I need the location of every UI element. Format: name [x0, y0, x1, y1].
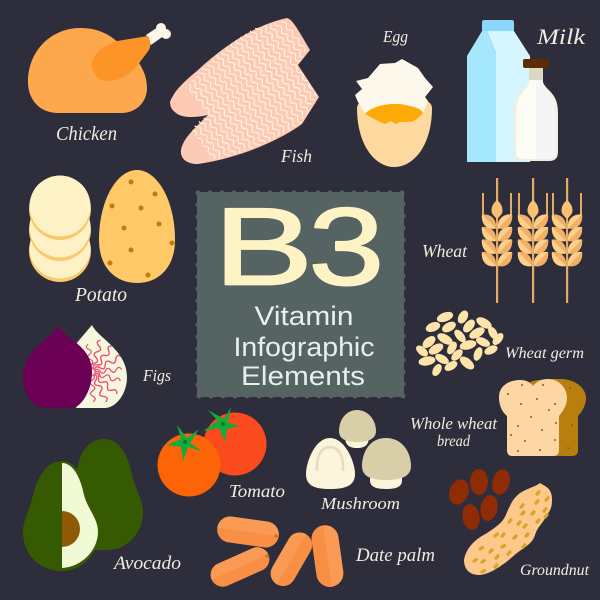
icon: mushrooms — [306, 410, 411, 489]
icon: fish fillets — [170, 18, 319, 164]
label: fish: Fish — [280, 146, 312, 166]
label: groundnut: Groundnut — [520, 562, 590, 579]
label: egg: Egg — [382, 27, 408, 46]
panel: title — [197, 185, 404, 397]
icon: potato slices — [29, 176, 91, 282]
icon: figs — [23, 325, 127, 408]
label: milk: Milk — [536, 24, 586, 49]
icon: egg — [355, 59, 433, 167]
label: mushroom: Mushroom — [320, 494, 400, 513]
label: chicken: Chicken — [56, 123, 117, 145]
label: whole wheat bread: Whole wheat — [410, 414, 498, 433]
text: Vitamin Infographic Elements: Vitamin — [254, 301, 354, 331]
text: Vitamin Infographic Elements: Infographic — [234, 332, 374, 362]
heading: B3 — [214, 185, 384, 308]
label: date palm: Date palm — [355, 546, 435, 566]
label: avocado: Avocado — [112, 553, 181, 574]
icon: bread — [499, 379, 586, 456]
text: Vitamin Infographic Elements — [234, 301, 374, 391]
label: wheat: Wheat — [422, 241, 468, 261]
icon: date palm — [207, 515, 345, 591]
icon: tomatoes — [158, 407, 266, 496]
label: tomato: Tomato — [229, 481, 285, 501]
icon: date fruit — [446, 467, 513, 531]
label: figs: Figs — [142, 366, 171, 385]
heading: B3: 3 — [308, 186, 384, 308]
icon: avocado — [23, 439, 143, 571]
icon: wheat — [482, 178, 582, 303]
icon: chicken — [28, 23, 171, 113]
label: whole wheat bread: bread — [437, 433, 471, 450]
icon: groundnut — [464, 483, 552, 575]
label: potato: Potato — [74, 285, 127, 306]
icon: whole potato — [99, 170, 175, 283]
icon: milk carton and bottle — [467, 20, 558, 162]
icon: wheat germ — [415, 309, 505, 377]
heading: B3: B — [214, 185, 313, 308]
text: Vitamin Infographic Elements: Elements — [241, 361, 365, 391]
label: wheat germ: Wheat germ — [505, 345, 584, 362]
label: whole wheat bread — [410, 414, 498, 450]
